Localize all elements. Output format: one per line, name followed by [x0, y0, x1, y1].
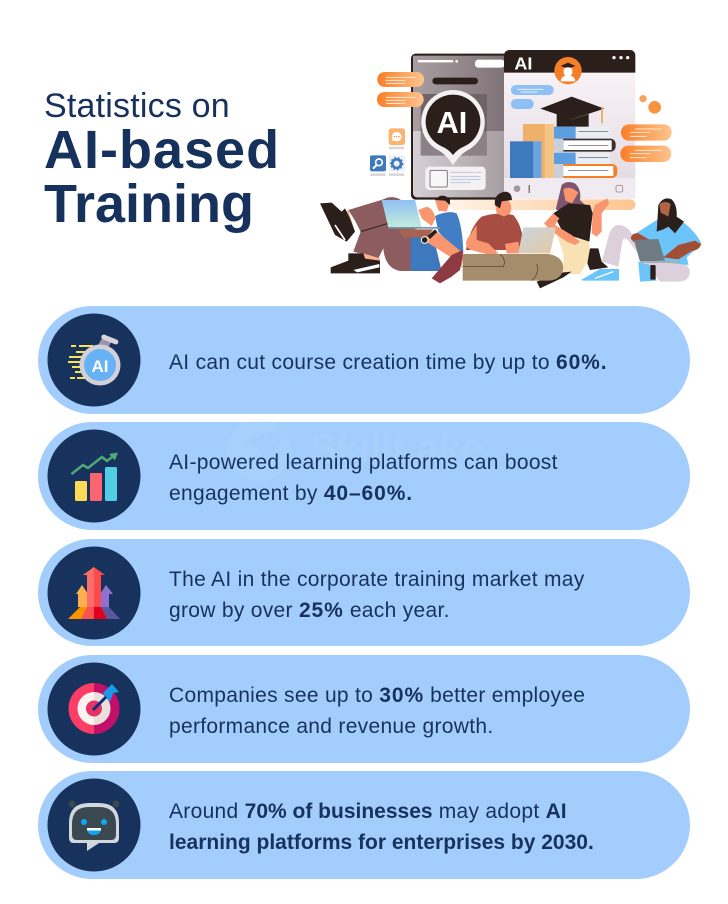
text: engagement: engagement by 40–60%.: [169, 482, 413, 505]
text: engagement: AI-powered learning platforms can boost: [169, 451, 558, 474]
graduation cap: [540, 97, 604, 127]
illustration: people learning with AI devices: [320, 50, 702, 288]
panel: employee performance stat: [38, 655, 690, 763]
panel: market growth stat: [38, 539, 690, 646]
title line: Statistics on: Statistics on: [44, 87, 230, 125]
icon: rising arrows: [48, 546, 140, 640]
watermark: SkillLake: [310, 427, 483, 471]
right window: AI: [514, 53, 532, 73]
title line: Training: Training: [44, 174, 254, 234]
icon: chatbot: [48, 778, 140, 872]
books: [510, 124, 617, 178]
text: performance: [169, 684, 585, 738]
text: adoption: learning platforms for enterprises by 2030.: [169, 831, 594, 854]
text: performance: performance and revenue growth.: [169, 715, 493, 738]
text: course creation: AI can cut course creation time by up to 60%.: [169, 351, 607, 374]
orange chat bubbles left: [377, 72, 424, 107]
orange chat bubbles right: [620, 124, 672, 162]
AI speech pin: AI: [437, 106, 467, 140]
left tablet: [411, 54, 511, 200]
title line: AI-based: AI-based: [44, 120, 280, 180]
text: market: grow by over 25% each year.: [169, 599, 450, 622]
text: adoption: [169, 800, 594, 854]
window footer: [504, 178, 635, 199]
icon tiles: [370, 128, 405, 176]
icon: dart target: [48, 662, 140, 756]
text: adoption: Around 70% of businesses may adopt AI: [169, 800, 567, 823]
icon: stopwatch AI: [48, 314, 140, 406]
person 4: woman in blue: [581, 198, 702, 282]
floating dots: [639, 95, 661, 114]
person 3: woman in black: [544, 182, 609, 274]
AI speech pin: [421, 90, 485, 165]
text: market: [169, 568, 585, 622]
icon: growth bar chart: [48, 430, 140, 522]
title: [44, 87, 280, 234]
person 2: man with glasses: [463, 192, 572, 288]
person 1: man with blue laptop: [320, 196, 463, 283]
base bar: [450, 199, 635, 210]
tablet card: [425, 167, 486, 190]
right window: [504, 50, 635, 199]
panel: engagement stat: [38, 422, 690, 530]
watermark: [226, 417, 506, 483]
panel: course creation stat: [38, 306, 690, 414]
text: market: The AI in the corporate training market may: [169, 568, 585, 591]
avatar: [554, 57, 582, 84]
text: engagement: [169, 451, 558, 505]
icon: stopwatch AI: AI: [92, 357, 108, 376]
panel: adoption stat: [38, 771, 690, 879]
text: performance: Companies see up to 30% better employee: [169, 684, 585, 707]
